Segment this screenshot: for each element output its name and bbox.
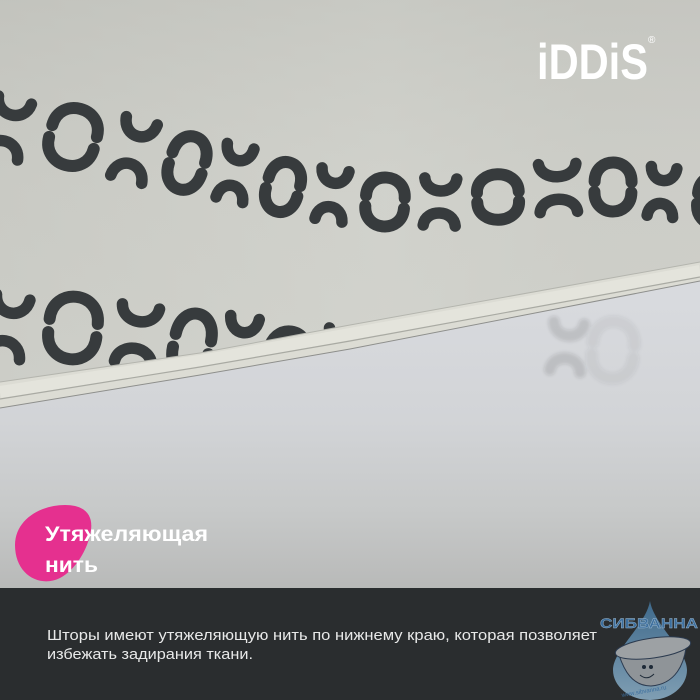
description text: Шторы имеют утяжеляющую нить по нижнему краю, которая позволяет	[47, 627, 597, 644]
logo: IDDIS: ®	[648, 35, 656, 46]
description text	[47, 627, 597, 663]
icon: water drop	[613, 601, 687, 700]
logo: IDDIS: iDDiS	[537, 34, 648, 90]
top wavy pattern row	[0, 96, 700, 228]
brand name: СИБВАННА	[600, 615, 698, 631]
upper patterned curtain	[0, 0, 700, 395]
description text: избежать задирания ткани.	[47, 646, 253, 663]
ghost reflection of pattern through lower sheet	[550, 320, 636, 380]
heading	[45, 523, 208, 577]
lower pattern row, cut by the hem	[0, 290, 336, 366]
weighted hem	[0, 262, 700, 408]
heading: нить	[45, 554, 98, 577]
icon: bathtub	[614, 633, 692, 686]
watermark logo: Сибванна	[600, 601, 698, 700]
badge: pink blob	[15, 505, 91, 581]
heading: Утяжеляющая	[45, 523, 208, 546]
website caption: www.sibvanna.ru	[620, 685, 667, 699]
footer panel	[0, 588, 700, 700]
